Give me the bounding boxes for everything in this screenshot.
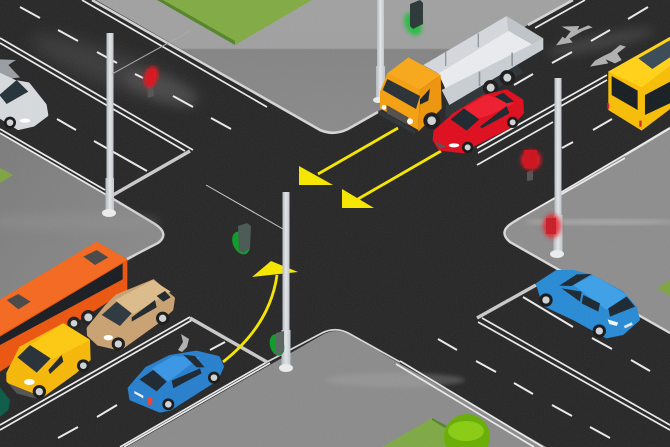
car: blue hatchback — [538, 272, 638, 338]
lamp post: top centre — [373, 0, 385, 103]
road arrows — [178, 25, 626, 352]
car: tan SUV — [88, 280, 173, 351]
lamp post: right — [550, 78, 564, 258]
yellow arrows: straight ahead — [299, 128, 441, 208]
bus: orange — [0, 242, 127, 372]
road wear smudges — [25, 23, 655, 117]
sidewalk: bottom corner — [118, 330, 555, 447]
sidewalk: top corner — [82, 0, 585, 133]
sidewalk: left corner — [0, 130, 164, 338]
stop lines — [113, 151, 536, 362]
lamp post: centre — [279, 192, 293, 372]
traffic light: top left, red — [141, 65, 161, 98]
traffic light: lower centre, green — [267, 331, 287, 357]
bus: yellow — [607, 35, 670, 131]
car: red sedan — [434, 91, 522, 153]
sidewalk haze — [0, 214, 670, 387]
truck: flatbed — [379, 16, 543, 134]
traffic light: right, red — [521, 150, 541, 181]
car: blue sedan — [129, 352, 222, 411]
tree — [444, 414, 490, 447]
yellow arrow: left turn — [223, 261, 298, 362]
traffic light: centre, green — [229, 223, 253, 257]
van: yellow — [8, 323, 90, 398]
traffic light: top centre, green — [401, 0, 425, 38]
traffic light: lower right, red — [543, 214, 561, 238]
car: green partial — [0, 387, 10, 417]
car: silver sedan — [0, 59, 47, 129]
lamp post: top left — [102, 31, 190, 217]
sidewalk: right corner — [504, 126, 670, 337]
